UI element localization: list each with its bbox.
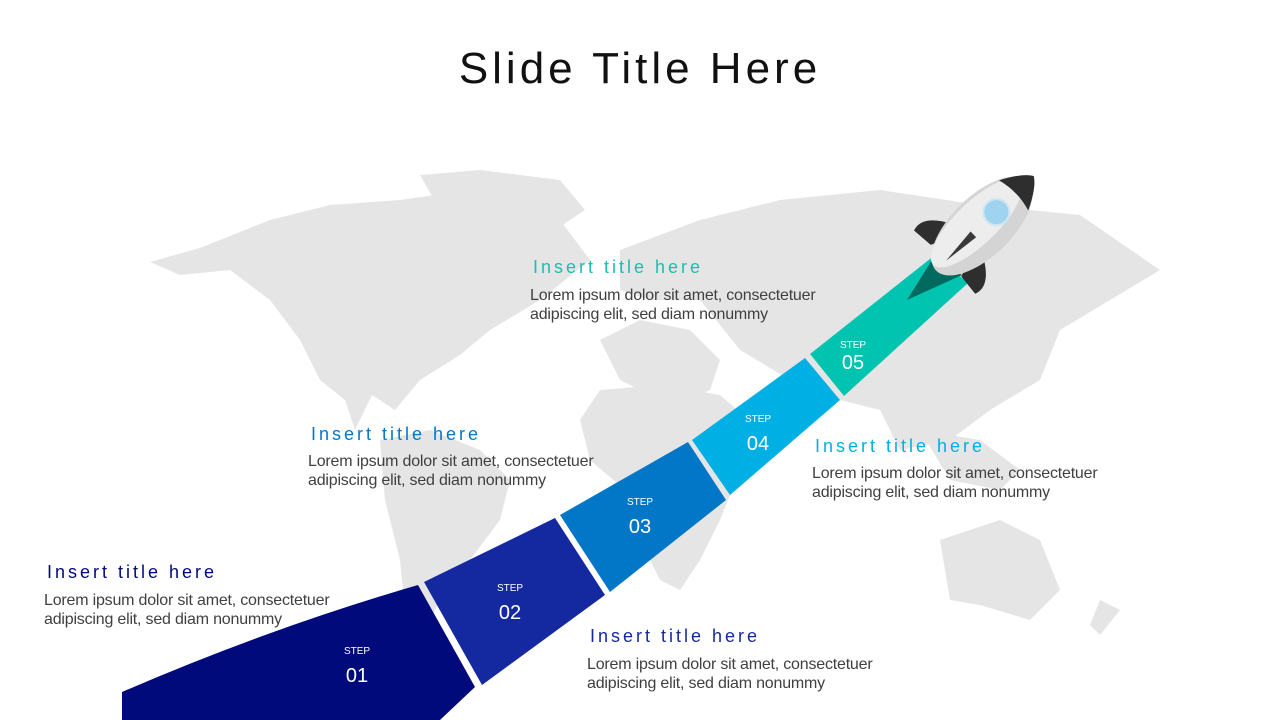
step 4 segment: 04 bbox=[747, 433, 769, 455]
step 2 segment: STEP bbox=[497, 583, 523, 594]
text: Lorem ipsum dolor sit amet, consectetuer bbox=[44, 592, 329, 609]
step 3 segment: STEP bbox=[627, 497, 653, 508]
text: adipiscing elit, sed diam nonummy bbox=[530, 306, 768, 323]
text: Lorem ipsum dolor sit amet, consectetuer bbox=[530, 287, 815, 304]
step 1 segment: STEP bbox=[344, 646, 370, 657]
text: Lorem ipsum dolor sit amet, consectetuer bbox=[812, 465, 1097, 482]
text: Insert title here bbox=[47, 562, 217, 582]
text: Insert title here bbox=[815, 436, 985, 456]
text: adipiscing elit, sed diam nonummy bbox=[587, 675, 825, 692]
step 4 segment bbox=[692, 358, 840, 495]
step 5 segment bbox=[810, 255, 968, 396]
step 2 segment: 02 bbox=[499, 602, 521, 624]
step 5 segment: 05 bbox=[842, 352, 864, 374]
text: Lorem ipsum dolor sit amet, consectetuer bbox=[587, 656, 872, 673]
text: Lorem ipsum dolor sit amet, consectetuer bbox=[308, 453, 593, 470]
text block: step 1 bbox=[44, 562, 330, 628]
step 4 segment: STEP bbox=[745, 414, 771, 425]
step 2 segment bbox=[424, 518, 605, 685]
text: Insert title here bbox=[311, 424, 481, 444]
text: adipiscing elit, sed diam nonummy bbox=[812, 484, 1050, 501]
step 3 segment bbox=[560, 442, 726, 592]
text: adipiscing elit, sed diam nonummy bbox=[308, 472, 546, 489]
text: adipiscing elit, sed diam nonummy bbox=[44, 611, 282, 628]
step 5 segment: STEP bbox=[840, 340, 866, 351]
text block: step 4 bbox=[812, 436, 1098, 501]
text: Insert title here bbox=[533, 257, 703, 277]
text block: step 5 bbox=[530, 257, 816, 323]
text block: step 2 bbox=[587, 626, 872, 692]
step 1 segment bbox=[122, 585, 475, 720]
text block: step 3 bbox=[308, 424, 594, 489]
text: Insert title here bbox=[590, 626, 760, 646]
step 1 segment: 01 bbox=[346, 665, 368, 687]
step 3 segment: 03 bbox=[629, 516, 651, 538]
title: Slide Title Here bbox=[459, 44, 821, 93]
